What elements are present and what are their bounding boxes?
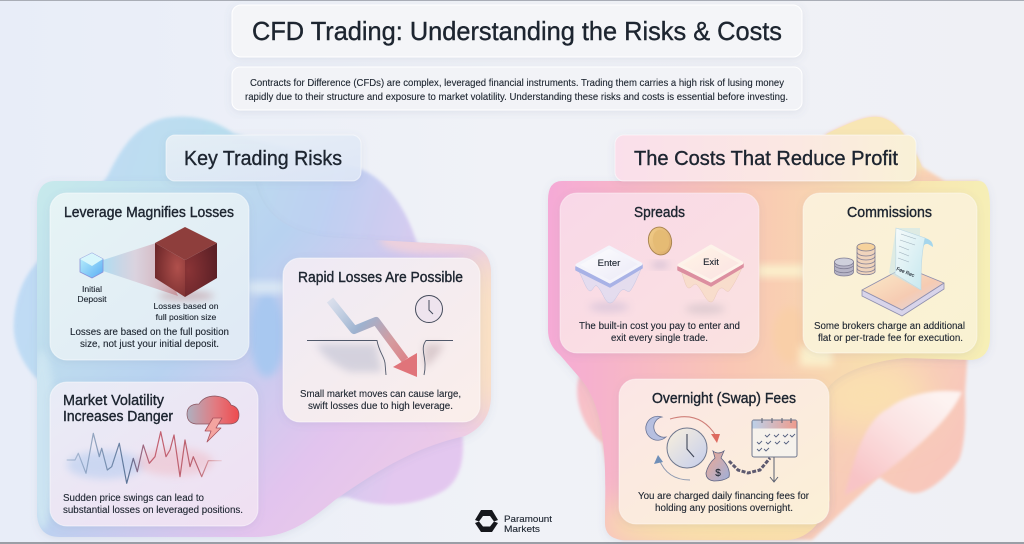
card: spreads: Spreads <box>634 205 685 221</box>
card: leverage magnifies losses: Leverage Magnifies Losses <box>64 205 234 221</box>
icon: large loss cube <box>155 227 217 301</box>
icon: moon <box>646 416 666 440</box>
description: Losses are based on the full position <box>70 327 229 338</box>
label: initial deposit: Deposit <box>77 294 107 304</box>
panel: key trading risks <box>14 117 517 537</box>
panel: costs that reduce profit <box>548 100 990 544</box>
intro text block: rapidly due to their structure and exposure to market volatility. Understanding these risks and costs is essential before investing. <box>245 91 788 103</box>
heading pill: the costs that reduce profit <box>615 135 916 181</box>
icon: receipt: Fee Rec <box>895 266 915 279</box>
icon: calendar with checks <box>752 418 797 482</box>
card: market volatility increases danger: Increases Danger <box>63 408 173 425</box>
icon: clock <box>416 296 442 322</box>
heading pill: key trading risks <box>166 135 361 181</box>
description: swift losses due to high leverage. <box>308 401 453 412</box>
icon: magnification cone <box>100 243 178 296</box>
title: CFD Trading: Understanding the Risks & Costs <box>252 16 782 46</box>
logo: Paramount Markets: Paramount <box>504 514 552 525</box>
card: leverage magnifies losses <box>50 193 249 360</box>
icon: coin stacks <box>834 243 875 276</box>
description: size, not just your initial deposit. <box>80 339 219 350</box>
icon: overnight clock <box>667 428 707 468</box>
icon: receipt <box>889 228 933 290</box>
page curl <box>845 391 962 495</box>
blob colour wash <box>826 116 930 434</box>
logo: Paramount Markets <box>475 510 552 535</box>
card: rapid losses are possible <box>283 258 480 422</box>
description: substantial losses on leveraged positions. <box>63 505 243 516</box>
intro text block: Contracts for Difference (CFDs) are complex, leveraged financial instruments. Trading them carries a high risk of lusing money <box>250 77 785 89</box>
icon: storm cloud <box>187 396 239 442</box>
card: commissions <box>803 193 977 353</box>
description: Small market moves can cause large, <box>300 389 461 400</box>
icon: cycle arrows <box>654 417 720 480</box>
card: overnight swap fees <box>619 379 829 524</box>
label: losses based on full position size: Losses based on <box>154 301 219 311</box>
card: market volatility increases danger <box>50 382 258 526</box>
description: Sudden price swings can lead to <box>63 493 204 504</box>
card: commissions: Commissions <box>847 205 932 221</box>
intro text block <box>232 67 802 110</box>
outer blob: costs <box>577 117 979 540</box>
description: The built-in cost you pay to enter and <box>579 321 740 332</box>
frame colour wash <box>590 265 850 544</box>
description: flat or per-trade fee for execution. <box>818 333 963 344</box>
outer blob: risks <box>14 117 463 504</box>
description: exit every single trade. <box>611 333 708 344</box>
title <box>232 5 802 57</box>
glass frame: risks <box>37 181 491 537</box>
icon: tablet <box>862 267 944 316</box>
icon: money bag and chain: $ <box>715 468 721 479</box>
frame colour wash <box>28 226 517 530</box>
label: initial deposit: Initial <box>82 284 102 294</box>
icon: enter platform: Enter <box>598 258 620 269</box>
icon: coin <box>646 225 674 268</box>
icon: exit platform <box>678 246 743 314</box>
card: rapid losses are possible: Rapid Losses Are Possible <box>298 270 463 286</box>
icon: exit platform: Exit <box>703 257 719 268</box>
icon: small deposit cube <box>80 253 103 278</box>
heading pill: key trading risks: Key Trading Risks <box>184 147 342 170</box>
logo: Paramount Markets: Markets <box>504 524 540 535</box>
icon: money bag and chain <box>706 451 770 481</box>
card: market volatility increases danger: Market Volatility <box>63 392 164 409</box>
icon: falling arrow into a crack <box>307 300 453 377</box>
description: You are charged daily financing fees for <box>638 491 810 502</box>
description: Some brokers charge an additional <box>814 321 965 332</box>
card: overnight swap fees: Overnight (Swap) Fees <box>652 391 796 407</box>
chart: volatility line <box>67 432 222 483</box>
description: holding any positions overnight. <box>655 503 793 514</box>
label: losses based on full position size: full position size <box>156 312 217 322</box>
card: spreads <box>560 193 759 353</box>
heading pill: the costs that reduce profit: The Costs That Reduce Profit <box>634 147 898 170</box>
glass frame: costs <box>548 181 990 540</box>
icon: enter platform <box>576 247 642 312</box>
